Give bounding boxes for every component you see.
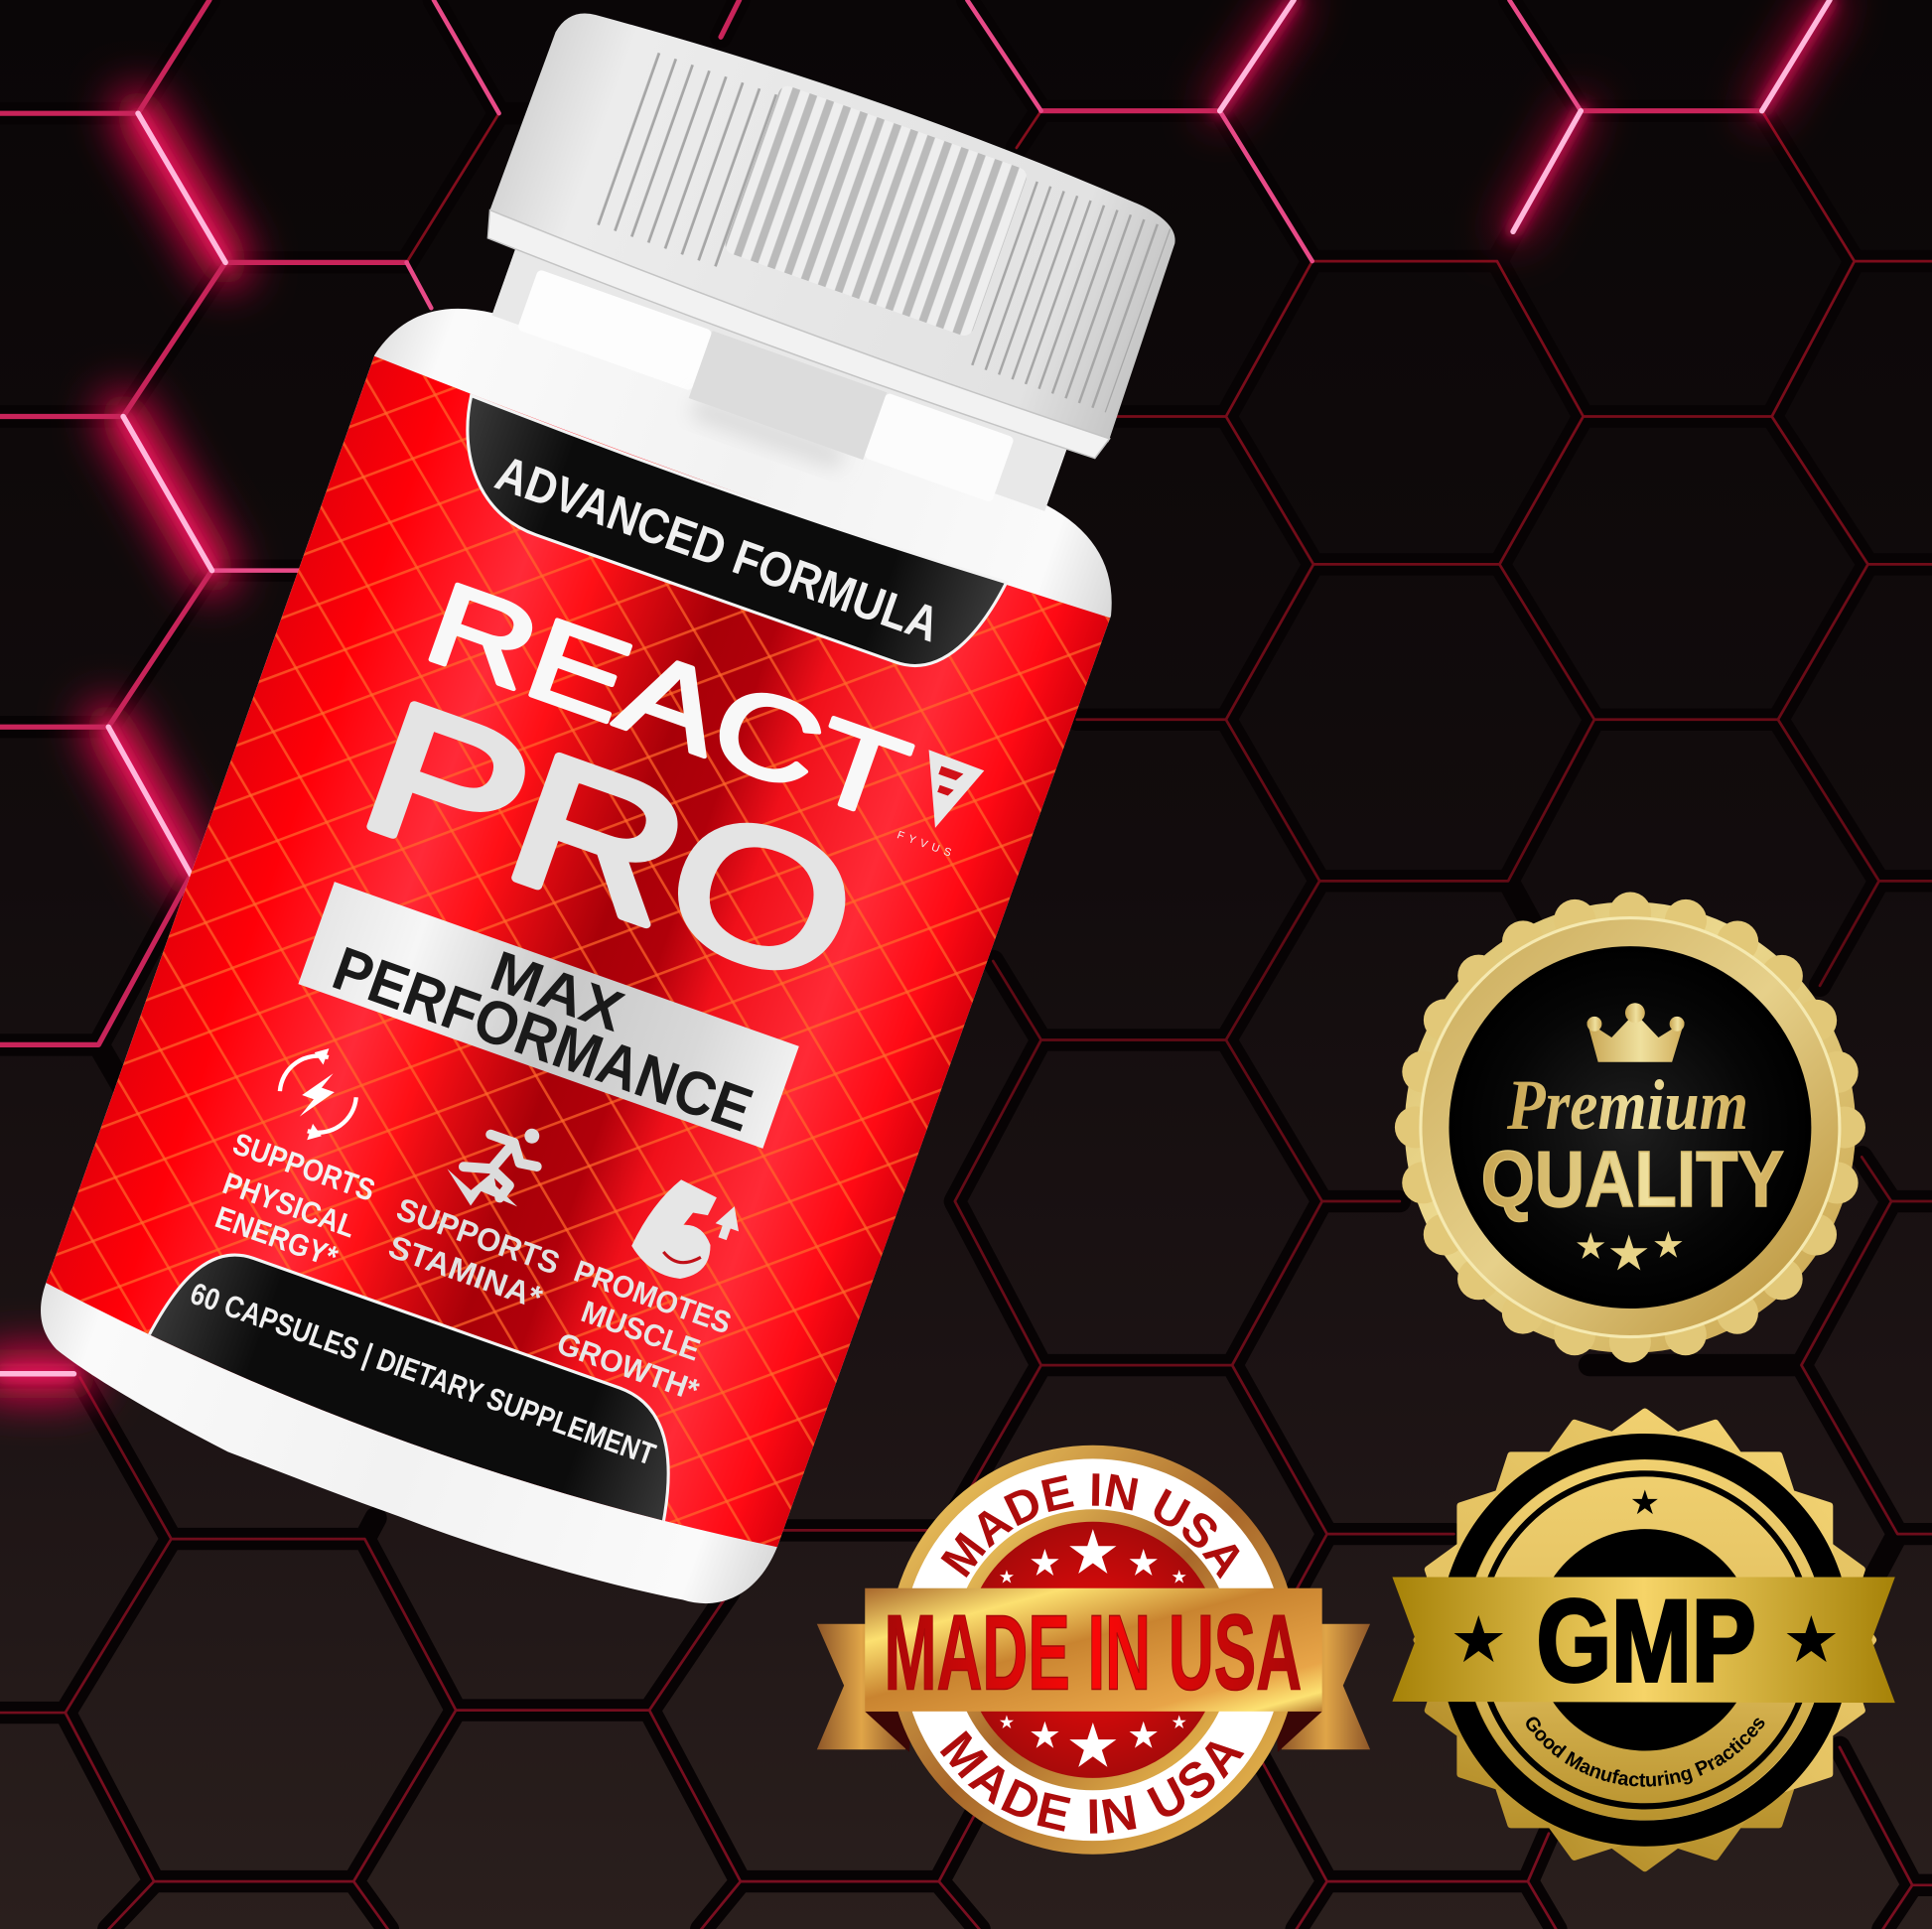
icon: three stars	[1577, 1231, 1683, 1270]
ribbon folds	[865, 1712, 1322, 1752]
bottle cap	[479, 0, 1189, 464]
text: arc bottom: MADE IN USA	[939, 1730, 1245, 1834]
cap ring	[479, 210, 1113, 464]
thin black ring	[1478, 1473, 1811, 1806]
cap ribs center	[723, 83, 1030, 339]
cap ribs left	[594, 52, 777, 267]
text: supports physical energy	[204, 1126, 379, 1279]
text: promotes muscle growth: GROWTH*	[553, 1325, 704, 1408]
icon: brand logo	[896, 750, 986, 861]
text: promotes muscle growth: MUSCLE	[577, 1294, 705, 1368]
brand: react: REACT	[411, 557, 924, 845]
text: quality: QUALITY	[1481, 1135, 1784, 1223]
icon: crown	[1587, 1003, 1685, 1062]
cap ribs right	[962, 178, 1171, 412]
ribbon	[1392, 1578, 1895, 1703]
text: supports physical energy: SUPPORTS	[228, 1126, 379, 1208]
text: max: MAX	[483, 939, 631, 1044]
icon: ribbon stars	[1454, 1615, 1836, 1662]
gold ring	[1421, 918, 1840, 1337]
text: supports stamina	[379, 1191, 564, 1317]
gold disc	[1465, 1460, 1825, 1820]
red center	[965, 1522, 1221, 1778]
black center	[1449, 946, 1811, 1309]
bottle neck shading	[482, 243, 1070, 540]
scalloped edge	[1405, 901, 1856, 1353]
icon: muscle arm	[626, 1171, 749, 1294]
brand: pro: PRO	[341, 661, 882, 1025]
text: performance: PERFORMANCE	[325, 934, 760, 1146]
white banner	[298, 882, 799, 1149]
label	[21, 352, 1113, 1612]
icon: runner	[438, 1106, 548, 1222]
text: made in usa: MADE IN USA	[884, 1591, 1302, 1712]
main ribbon	[865, 1588, 1322, 1712]
text: good manufacturing practices: Good Manufacturing Practices	[1526, 1718, 1765, 1787]
ribbon tails	[817, 1624, 1370, 1749]
outer ring	[889, 1446, 1298, 1855]
starburst edge	[1361, 1328, 1932, 1924]
badge: gmp	[1392, 1408, 1895, 1872]
icon: top star	[1632, 1489, 1658, 1514]
product bottle	[41, 14, 1175, 1604]
bottom black banner	[148, 1253, 670, 1521]
text: supports stamina: SUPPORTS	[392, 1191, 564, 1282]
black center	[1534, 1529, 1756, 1751]
inner gold ring	[952, 1509, 1233, 1790]
icon: energy	[266, 1037, 369, 1152]
black ring	[1451, 1447, 1839, 1834]
text: premium: Premium	[1506, 1065, 1748, 1145]
text: gmp: GMP	[1537, 1576, 1756, 1706]
white field	[901, 1458, 1284, 1841]
badge: premium quality	[1405, 901, 1856, 1353]
text: capsules and dietary supplement: 60 CAPSULES | DIETARY SUPPLEMENT	[186, 1276, 660, 1472]
icon: white stars	[1000, 1529, 1186, 1767]
text: supports stamina: STAMINA*	[384, 1228, 547, 1315]
text: supports physical energy: ENERGY*	[210, 1199, 343, 1275]
top black banner	[435, 393, 1007, 688]
bottle body	[12, 202, 1166, 1640]
text: arc top: MADE IN USA	[941, 1473, 1240, 1580]
icon: brand logo: FYVUS	[896, 829, 957, 861]
text: promotes muscle growth	[545, 1253, 736, 1411]
text: advanced formula: ADVANCED FORMULA	[488, 445, 946, 652]
text: supports physical energy: PHYSICAL	[218, 1166, 360, 1244]
text: promotes muscle growth: PROMOTES	[570, 1253, 736, 1341]
badge: made in usa	[816, 1446, 1370, 1855]
